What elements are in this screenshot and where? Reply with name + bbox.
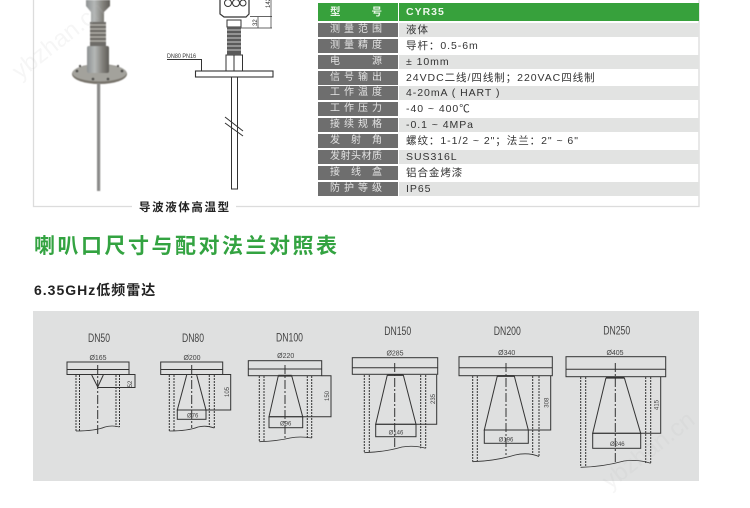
diagram: DN50: DN50 <box>88 333 110 345</box>
spec table: 接 线 盒 <box>330 167 382 178</box>
spec table: 发 射 角 <box>330 135 382 146</box>
spec table: 防护等级 <box>330 182 382 194</box>
table header: 型 号 <box>330 6 382 18</box>
spec table: -0.1 ~ 4MPa <box>406 119 474 131</box>
diagram: DN100: DN100 <box>276 332 303 344</box>
spec table: 工作压力 <box>330 103 382 114</box>
spec table: 发射头材质 <box>330 151 382 162</box>
spec table: 接续规格 <box>330 119 382 130</box>
spec table: 液体 <box>406 24 429 36</box>
spec table: 4-20mA ( HART ) <box>406 87 500 99</box>
diagram: DN80: DN80 <box>182 333 204 345</box>
spec table: 测量范围 <box>330 24 382 35</box>
diagram: DN50: Ø165 <box>89 355 107 362</box>
diagram: DN150: Ø285 <box>386 350 404 358</box>
diagram: DN200: 308 <box>544 397 550 408</box>
diagram: DN100: Ø96 <box>280 422 292 428</box>
diagram: DN250: 415 <box>654 399 660 410</box>
spec table: 螺纹：1-1/2 ~ 2"；法兰：2" ~ 6" <box>406 135 579 147</box>
diagram: DN200 <box>459 326 552 462</box>
diagram: DN80: Ø200 <box>183 355 201 362</box>
diagram: DN200: Ø340 <box>498 350 515 357</box>
spec table: 电 源 <box>330 56 382 67</box>
spec table: -40 ~ 400℃ <box>406 103 471 115</box>
diagram: DN80 <box>161 333 231 431</box>
diagram: DN150: 235 <box>431 393 437 404</box>
diagram: DN100 <box>248 332 331 442</box>
diagram: DN250: DN250 <box>603 326 630 338</box>
technical drawing: probe outline: 32 <box>253 19 259 26</box>
diagram: DN200: Ø196 <box>499 438 514 444</box>
spec table: 信号输出 <box>330 72 382 83</box>
table header <box>318 3 699 21</box>
diagram: DN250 <box>566 326 666 467</box>
spec table: 工作温度 <box>330 87 382 98</box>
diagram: DN150: DN150 <box>384 326 411 338</box>
spec table: 24VDC二线/四线制；220VAC四线制 <box>406 72 596 84</box>
spec table: ± 10mm <box>406 56 450 68</box>
diagram: DN100: 150 <box>325 390 331 401</box>
subheading: 6.35GHz低频雷达 <box>34 282 156 298</box>
table header: CYR35 <box>406 6 445 18</box>
diagram: DN80: 105 <box>225 386 231 397</box>
diagram: DN150: Ø146 <box>389 430 404 436</box>
watermarks: ybzhan.cn <box>597 406 700 495</box>
spec table: IP65 <box>406 182 431 194</box>
spec table: SUS316L <box>406 151 458 163</box>
diagram: DN100: Ø220 <box>277 353 294 360</box>
diagram: DN50 <box>67 333 135 434</box>
diagram: DN200: DN200 <box>494 326 521 338</box>
spec table <box>318 3 699 196</box>
caption: product type: 导波液体高温型 <box>139 202 231 214</box>
section heading: 喇叭口尺寸与配对法兰对照表 <box>34 235 340 258</box>
diagram: DN250: Ø405 <box>606 350 624 357</box>
spec table: 导杆：0.5-6m <box>406 40 479 52</box>
spec table: 铝合金烤漆 <box>406 167 463 179</box>
spec table: 测量精度 <box>330 40 382 51</box>
diagram: DN50: 52 <box>128 380 134 387</box>
diagram: DN80: Ø76 <box>187 414 199 420</box>
technical drawing: probe outline: DN80 PN16 <box>167 53 196 60</box>
diagram: DN150 <box>352 326 438 453</box>
diagram: DN250: Ø246 <box>610 442 625 448</box>
